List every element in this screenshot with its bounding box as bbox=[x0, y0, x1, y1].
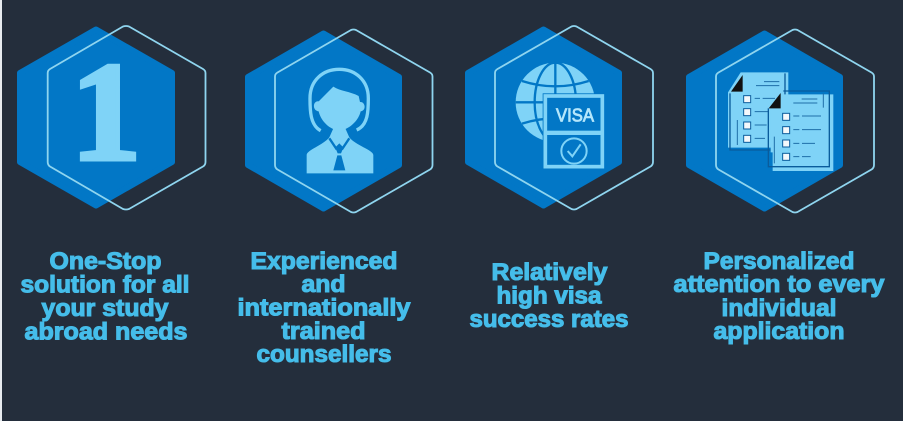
document: front bbox=[768, 91, 833, 171]
caption: one-stop solution bbox=[20, 248, 190, 346]
caption: one-stop solution: abroad needs bbox=[24, 318, 188, 346]
caption: experienced counsellers: internationally bbox=[238, 294, 411, 322]
caption: one-stop solution: your study bbox=[42, 295, 169, 322]
hexagon: outline bbox=[48, 26, 206, 210]
caption: experienced counsellers: Experienced bbox=[250, 248, 398, 275]
visa card: VISA bbox=[556, 104, 594, 125]
panel: one-stop solution bbox=[20, 26, 206, 346]
icon: numeral one: 1 bbox=[70, 32, 142, 190]
caption: experienced counsellers: and bbox=[302, 271, 346, 298]
document: back bbox=[728, 72, 788, 150]
hexagon: outline bbox=[275, 30, 432, 212]
caption: visa success: Relatively bbox=[492, 259, 608, 286]
icon: checklist documents bbox=[728, 72, 833, 171]
caption: experienced counsellers: counsellers bbox=[256, 341, 392, 368]
caption: personalized attention: individual bbox=[722, 295, 836, 322]
icon: counsellor with headset bbox=[307, 69, 373, 173]
caption: one-stop solution: One-Stop bbox=[50, 248, 162, 275]
caption: experienced counsellers bbox=[238, 248, 411, 368]
panel: experienced counsellers bbox=[238, 30, 432, 368]
caption: visa success: success rates bbox=[470, 306, 628, 333]
hexagon: filled bbox=[689, 34, 840, 208]
panel: personalized attention bbox=[674, 30, 885, 345]
caption: personalized attention: attention to every bbox=[674, 271, 885, 298]
icon: globe and visa card bbox=[516, 63, 605, 169]
caption: experienced counsellers: trained bbox=[282, 318, 366, 345]
hexagon: filled bbox=[20, 30, 172, 206]
hexagon: outline bbox=[716, 30, 874, 212]
caption: personalized attention: Personalized bbox=[704, 248, 854, 275]
hexagon: filled bbox=[468, 30, 619, 206]
caption: visa success: high visa bbox=[496, 282, 602, 310]
panel: visa success bbox=[468, 26, 653, 333]
caption: personalized attention bbox=[674, 248, 885, 345]
caption: visa success bbox=[470, 259, 628, 333]
caption: personalized attention: application bbox=[714, 318, 844, 345]
hexagon: filled bbox=[248, 34, 399, 208]
hexagon: outline bbox=[495, 26, 653, 210]
caption: one-stop solution: solution for all bbox=[20, 272, 190, 298]
